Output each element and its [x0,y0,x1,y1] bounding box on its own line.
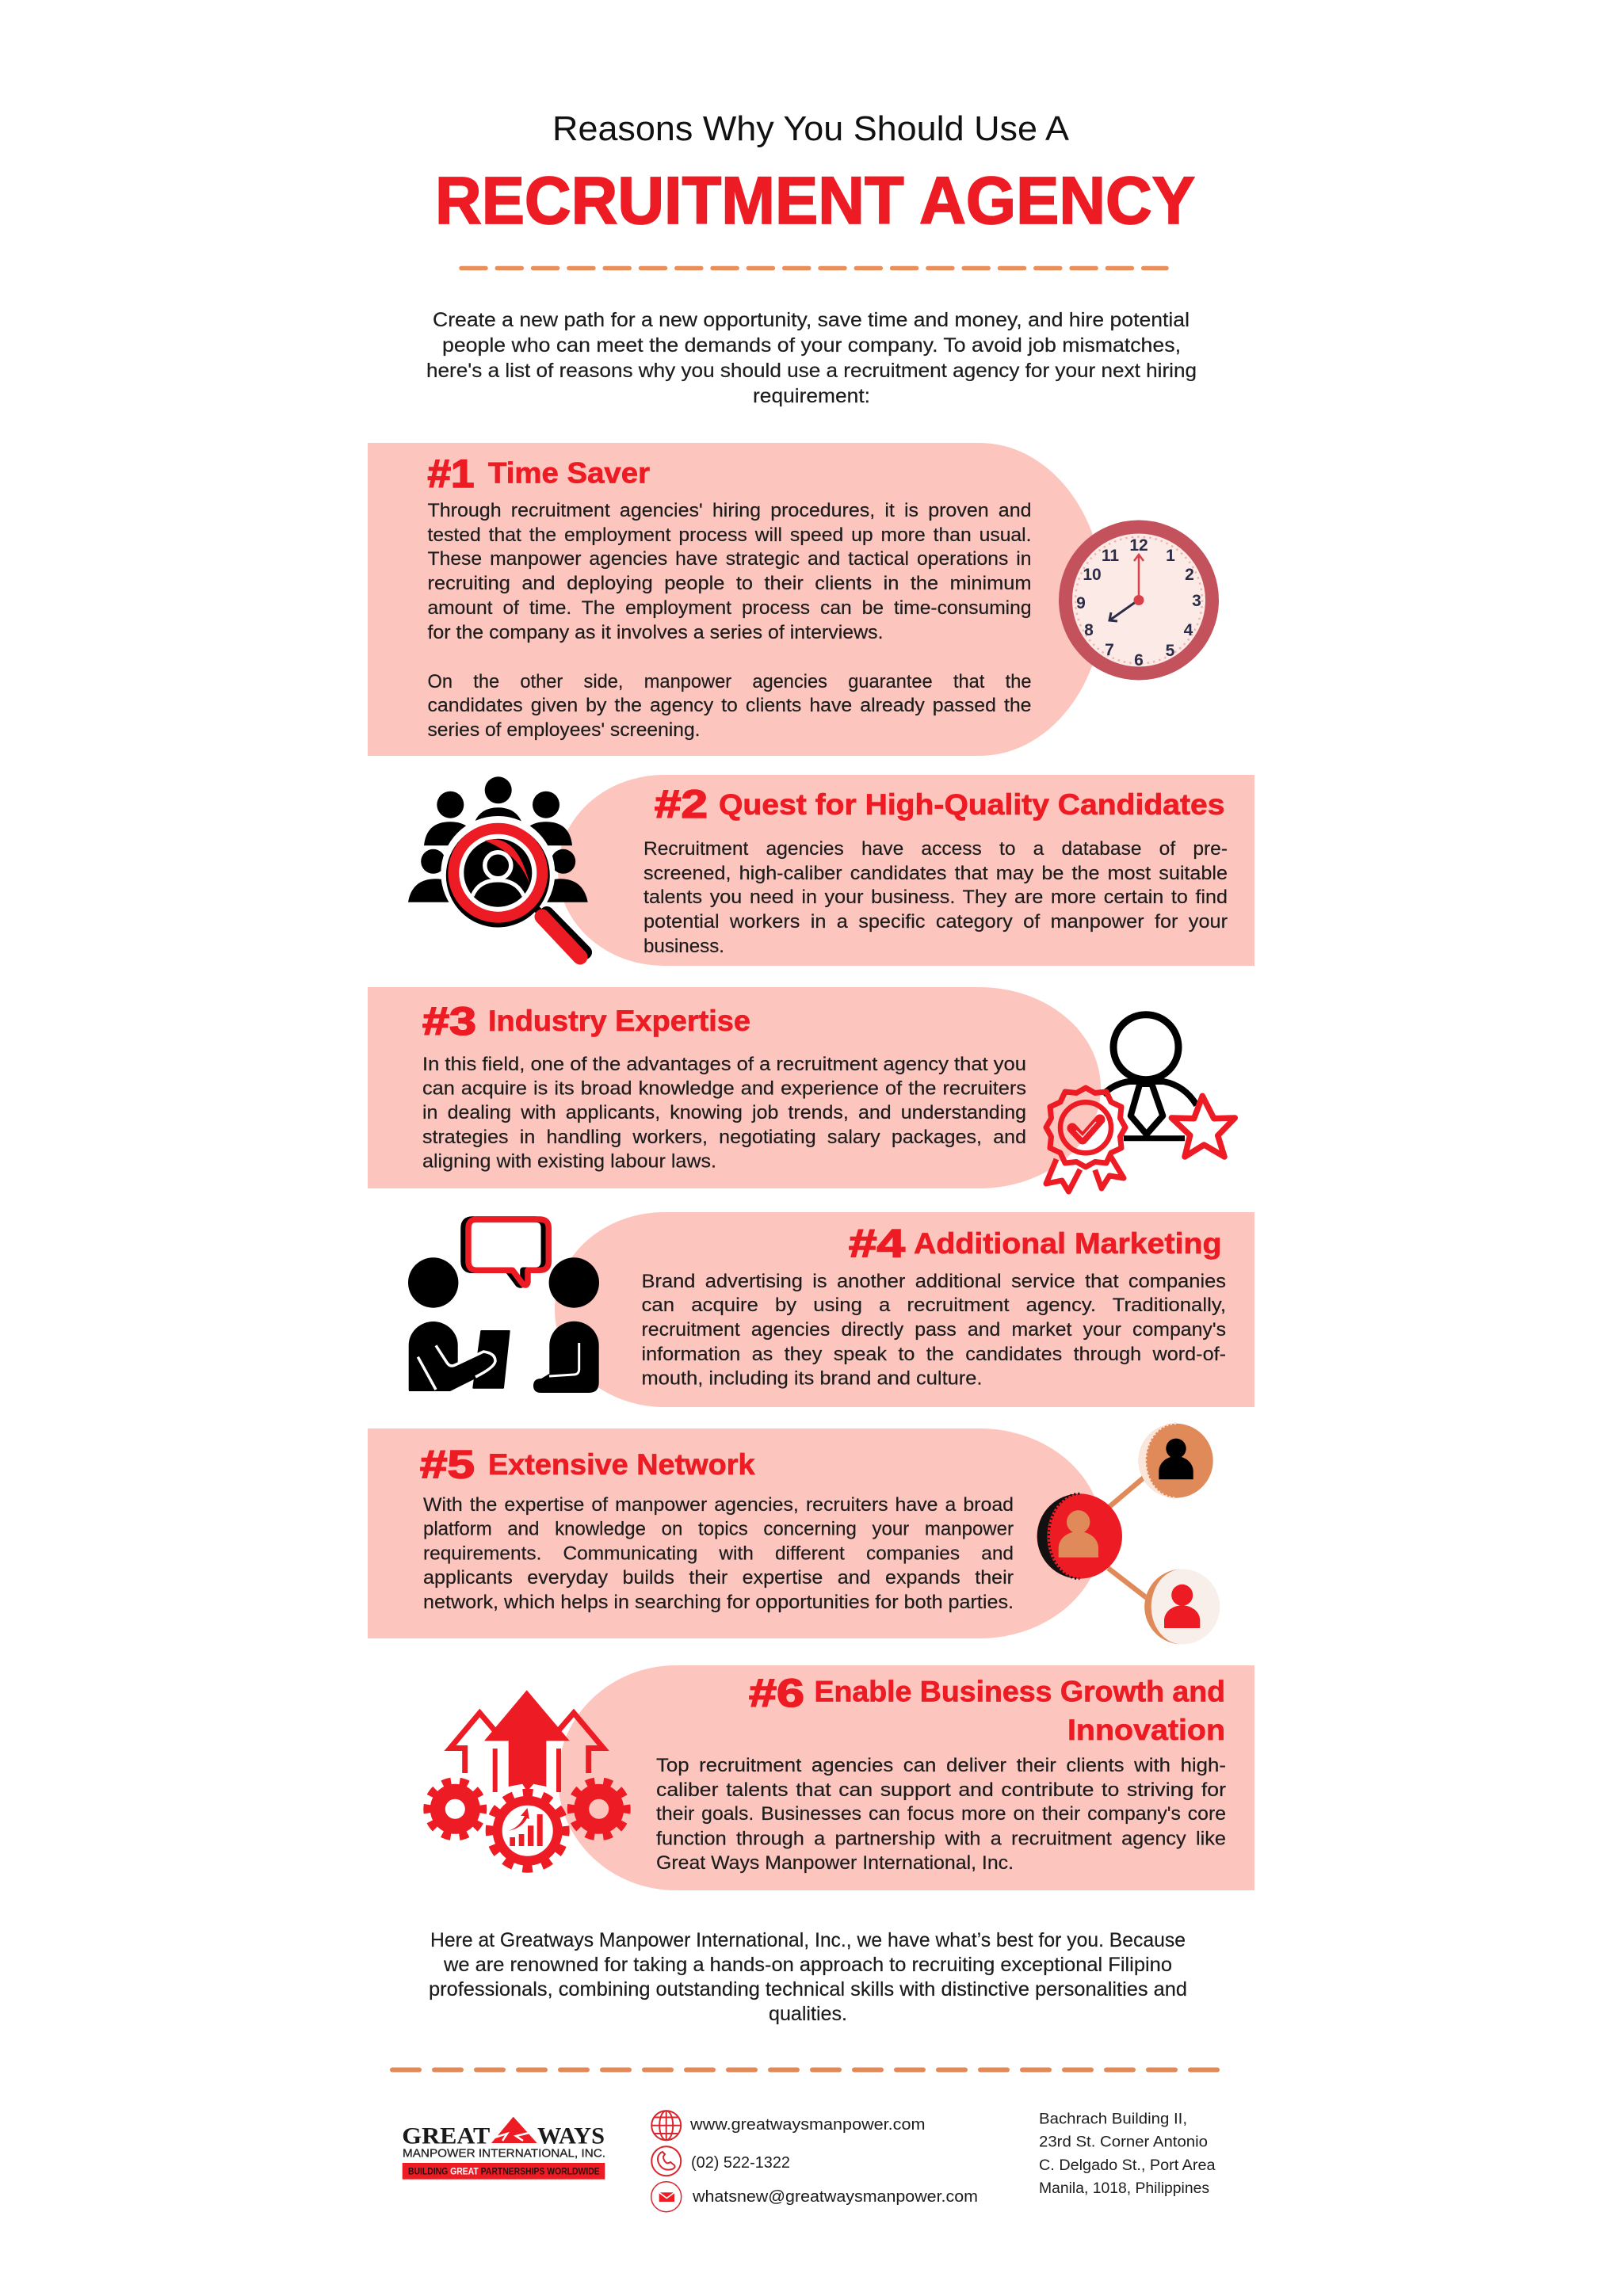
body text: Top recruitment agencies can deliver their clients with high- [656,1755,1226,1776]
heading: #6: Enable Business Growth and [815,1675,1225,1708]
address: 23rd St. Corner Antonio [1039,2134,1208,2150]
intro text: requirement: [753,385,870,407]
icon: clock: 10 [1083,566,1102,584]
email address: whatsnew@greatwaysmanpower.com [692,2188,978,2206]
icon: two people talking [408,1219,599,1393]
body text: Brand advertising is another additional service that companies [642,1271,1226,1292]
icon: phone [651,2146,681,2176]
logo: Great Ways Manpower International: WAYS [537,2123,605,2149]
heading: #3: Industry Expertise [488,1005,750,1037]
icon: clock: 4 [1184,621,1193,639]
title [435,109,1195,238]
panel: #5 extensive network [368,1428,1102,1638]
body text: With the expertise of manpower agencies, recruiters have a broad [423,1494,1014,1516]
heading: #4: #4 [849,1222,905,1266]
body text [656,1755,1226,1874]
body text: business. [643,936,724,957]
icon: clock: 6 [1134,651,1144,669]
body text: for the company as it involves a series of interviews. [428,622,883,643]
panel: #6 enable business growth and innovation [558,1665,1254,1890]
body text: These manpower agencies have strategic and tactical operations in [428,548,1032,570]
body text: in dealing with applicants, knowing job trends, and understanding [422,1102,1026,1123]
body text [428,500,1032,741]
title: Reasons Why You Should Use A [552,109,1070,148]
panel: #2 quest for high-quality candidates [558,775,1254,966]
body text: recruiting and deploying people to their clients in the minimum [428,573,1032,594]
intro text: people who can meet the demands of your company. To avoid job mismatches, [442,334,1181,357]
body text: network, which helps in searching for opportunities for both parties. [423,1592,1014,1613]
body text: talents you need in your business. They are more certain to find [643,887,1228,908]
heading: #5 [420,1442,755,1486]
body text: candidates given by the agency to clients have already passed the [428,695,1032,716]
heading: #6: #6 [749,1671,804,1715]
logo: Great Ways Manpower International [402,2117,605,2180]
body text: series of employees' screening. [428,719,701,741]
panel: #1 time saver [368,443,1104,756]
logo: Great Ways Manpower International: GREAT [402,2123,490,2149]
heading: #6 [749,1671,1225,1746]
intro text [426,309,1197,407]
intro text: Create a new path for a new opportunity, save time and money, and hire potential [433,309,1190,331]
body text: information as they speak to the candidates through word-of- [642,1344,1226,1365]
title: RECRUITMENT AGENCY [435,163,1195,238]
closing text [429,1929,1187,2025]
heading: #5: #5 [420,1442,475,1486]
heading: #2: #2 [655,782,708,826]
heading: #2: Quest for High-Quality Candidates [719,788,1225,821]
body text [422,1054,1026,1173]
heading: #6: Innovation [1067,1714,1225,1746]
icon: employee with rosette and star [1046,1015,1235,1192]
heading: #1 Time Saver: Time Saver [488,456,650,490]
logo: Great Ways Manpower International: BUILDING GREAT PARTNERSHIPS WORLDWIDE [408,2167,600,2176]
body text: Through recruitment agencies' hiring procedures, it is proven and [428,500,1032,521]
icon: clock: 5 [1166,642,1175,660]
icon: clock: 8 [1084,621,1094,639]
body text: caliber talents that can support and contribute to striving for [656,1779,1226,1801]
icon: clock: 3 [1192,592,1201,610]
body text: platform and knowledge on topics concerning your manpower [423,1518,1014,1540]
closing text: qualities. [769,2003,847,2025]
body text [643,838,1228,957]
website: www.greatwaysmanpower.com [689,2116,926,2134]
icon: email [651,2182,682,2212]
icon: clock: 1 [1166,547,1175,565]
body text: aligning with existing labour laws. [422,1150,716,1173]
closing text: we are renowned for taking a hands-on approach to recruiting exceptional Filipino [443,1954,1172,1976]
heading: #3 [422,999,750,1043]
body text: tested that the employment process will speed up more than usual. [428,524,1032,546]
icon: network of people [1037,1424,1220,1645]
address: Manila, 1018, Philippines [1039,2180,1209,2197]
body text: recruitment agencies directly pass and market your company's [642,1319,1226,1341]
body text: their goals. Businesses can focus more on their company's core [656,1803,1226,1825]
body text: mouth, including its brand and culture. [642,1367,983,1390]
heading: #1 Time Saver: #1 [428,452,474,496]
body text: Great Ways Manpower International, Inc. [656,1852,1014,1874]
body text: potential workers in a specific category of manpower for your [643,911,1228,933]
heading: #4 [849,1222,1222,1266]
icon: clock: 12 [1129,536,1148,555]
body text: amount of time. The employment process can be time-consuming [428,597,1032,619]
heading: #3: #3 [422,999,476,1043]
panel: #4 additional marketing [555,1212,1254,1407]
icon: globe [651,2111,681,2140]
address: C. Delgado St., Port Area [1039,2157,1216,2174]
body text: requirements. Communicating with different companies and [423,1543,1014,1564]
icon: clock: 7 [1105,641,1114,659]
heading: #5: Extensive Network [488,1448,755,1481]
closing text: Here at Greatways Manpower International, Inc., we have what’s best for you. Because [430,1929,1186,1951]
logo: Great Ways Manpower International: MANPOWER INTERNATIONAL, INC. [403,2148,605,2161]
body text: can acquire is its broad knowledge and experience of the recruiters [422,1077,1026,1100]
icon: people with magnifier [408,776,588,957]
icon: clock [1065,527,1212,673]
body text [423,1494,1014,1613]
body text: applicants everyday builds their expertise and expands their [423,1567,1014,1589]
address [1039,2111,1216,2197]
body text: function through a partnership with a recruitment agency like [656,1829,1226,1849]
panel: #3 industry expertise [368,987,1101,1188]
icon: clock: 9 [1076,594,1086,612]
body text: can acquire by using a recruitment agency. Traditionally, [642,1295,1226,1316]
icon: clock: 11 [1102,547,1119,565]
body text: screened, high-caliber candidates that may be the most suitable [643,863,1228,884]
icon: clock: 2 [1185,566,1194,584]
body text: strategies in handling workers, negotiating salary packages, and [422,1127,1026,1148]
body text: On the other side, manpower agencies guarantee that the [428,671,1032,692]
heading: #1 Time Saver [428,452,650,496]
body text: Recruitment agencies have access to a database of pre- [643,838,1228,860]
phone number: (02) 522-1322 [691,2154,790,2172]
body text: In this field, one of the advantages of a recruitment agency that you [422,1054,1026,1075]
icon: growth arrows and gears [427,1690,627,1868]
heading: #2 [655,782,1225,826]
closing text: professionals, combining outstanding technical skills with distinctive personalities and [429,1978,1187,2000]
intro text: here's a list of reasons why you should use a recruitment agency for your next hiring [426,360,1197,382]
address: Bachrach Building II, [1039,2111,1187,2128]
body text [642,1271,1226,1390]
heading: #4: Additional Marketing [914,1227,1222,1260]
